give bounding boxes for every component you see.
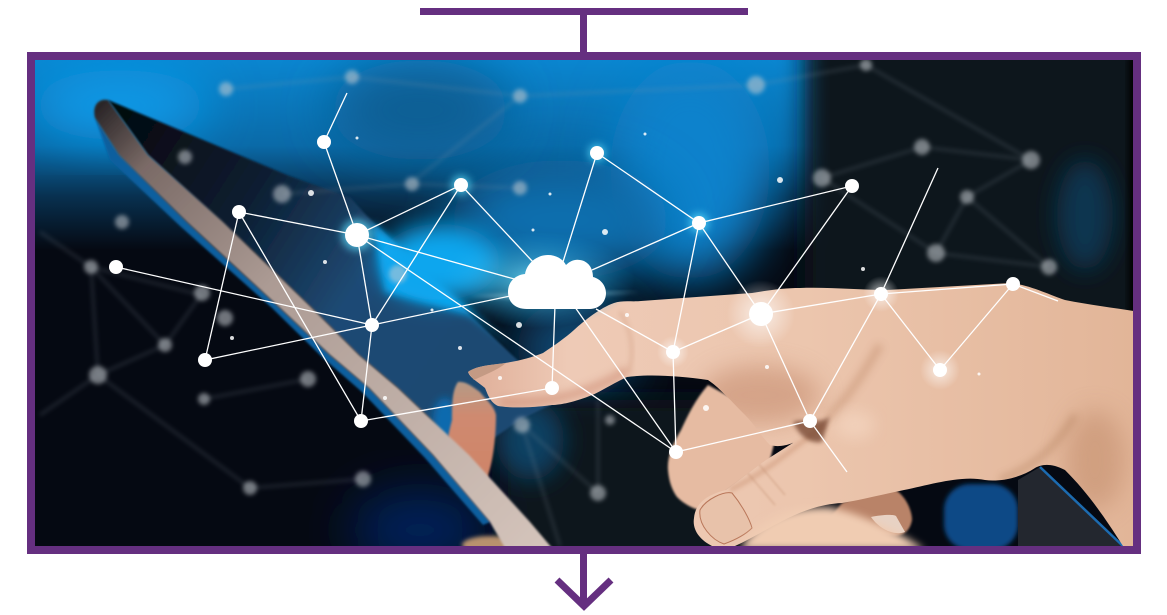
tablet [94, 100, 560, 554]
network nodes [109, 135, 1020, 459]
tablet blue side strip [95, 118, 490, 525]
thumb fingernail [700, 493, 752, 544]
screen glow [372, 222, 510, 345]
node glows [341, 144, 709, 251]
hand shading [500, 312, 1125, 510]
tablet screen [108, 100, 560, 455]
node blooms on hand [657, 276, 960, 390]
photo: tablet, hand and cloud network [35, 60, 1133, 546]
palm crease [793, 416, 830, 442]
tablet silver edge [94, 100, 552, 548]
bottom arrow [557, 554, 611, 606]
left thumb behind tablet [447, 382, 496, 482]
main hand [468, 283, 1140, 546]
middle finger [668, 385, 775, 510]
index fingernail [468, 363, 506, 380]
sparkle dots [230, 132, 980, 411]
cloud glow [456, 238, 634, 326]
photo frame [31, 56, 1137, 550]
top connector bar [420, 8, 748, 53]
network lines [116, 93, 1058, 472]
photo background [35, 60, 1133, 546]
blurred foreground finger [740, 507, 925, 550]
background network bokeh [40, 59, 1057, 546]
ring finger with nail [834, 491, 914, 536]
icon: cloud [508, 255, 606, 309]
lower finger behind tablet [459, 532, 506, 546]
